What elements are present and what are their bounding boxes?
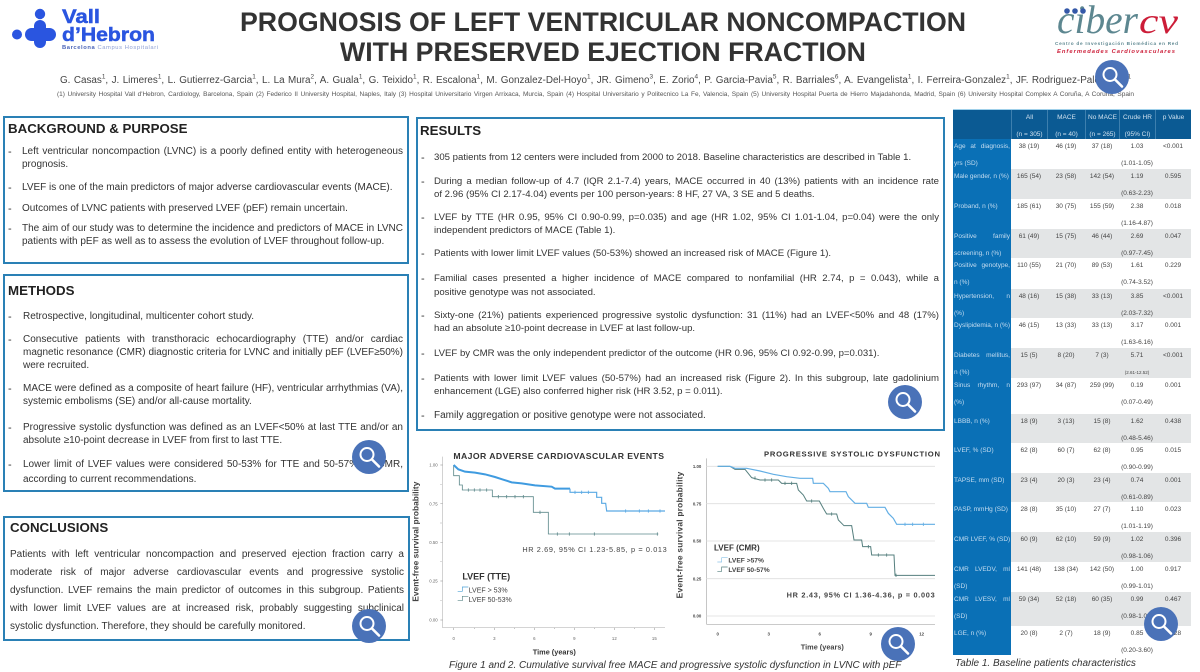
- table: baseline patients characteristics: 0.001: [1165, 477, 1181, 484]
- table: baseline patients characteristics: 2.38: [1131, 203, 1143, 210]
- logo: Vall d'Hebron: Vall: [62, 6, 100, 28]
- text: results bullets: 305 patients from 12 centers were included from 2000 to 2018. Baseline characteristics are described in Table 1.: [434, 152, 911, 163]
- table: baseline patients characteristics: 8 (20): [1058, 352, 1074, 359]
- table: baseline patients characteristics: (0.98-1.06): [1121, 553, 1153, 560]
- table: baseline patients characteristics: (2.61-12.52): [1125, 370, 1149, 375]
- table: baseline patients characteristics: <0.001: [1163, 143, 1183, 150]
- text: conclusions paragraph: moderate risk of major adverse cardiovascular events and progressive systolic: [10, 567, 404, 578]
- table: baseline patients characteristics: 0.74: [1131, 477, 1143, 484]
- table: baseline patients characteristics: Dyslipidemia, n (%): [954, 322, 1010, 329]
- table: baseline patients characteristics: (0.61-0.89): [1121, 494, 1153, 501]
- panel: methods: [3, 274, 409, 492]
- text: results bullets: enhancement (LGE) also conferred higher risk (HR 3.52, p = 0.011).: [434, 386, 723, 397]
- table: baseline patients characteristics: (0.99-1.01): [1121, 583, 1153, 590]
- axes: 0.75: [429, 501, 438, 506]
- table: baseline patients characteristics: 34 (87): [1056, 382, 1076, 389]
- text: results bullets: Patients with lower limit LVEF values (50-53%) showed an increased risk of MACE (Figure 1).: [434, 248, 831, 259]
- table: baseline patients characteristics: All: [1026, 114, 1033, 121]
- table: baseline patients characteristics: Hypertension, n (%): [954, 293, 1010, 317]
- table: baseline patients characteristics: 15 (5): [1020, 352, 1037, 359]
- table: baseline patients characteristics: CMR LVESV, ml (SD): [954, 596, 1010, 620]
- legend: LVEF (TTE): [462, 572, 510, 582]
- logo: CIBERCV: cv: [1139, 2, 1178, 41]
- table: baseline patients characteristics: 2.69: [1131, 233, 1143, 240]
- axes: 0.50: [429, 540, 438, 545]
- table: baseline patients characteristics: <0.001: [1163, 293, 1183, 300]
- table: baseline patients characteristics: 21 (70): [1056, 262, 1076, 269]
- text: conclusions paragraph: dysfunction. LVEF remains the main predictor of outcomes in this subgroup. Patients: [10, 585, 404, 596]
- axes: 1.00: [693, 464, 702, 469]
- text: background bullets: -: [8, 203, 12, 215]
- table: baseline patients characteristics: 23 (4): [1020, 477, 1037, 484]
- axes: 0: [452, 636, 455, 641]
- table: baseline patients characteristics: (0.48-5.46): [1121, 435, 1153, 442]
- table: baseline patients characteristics: (n = 265): [1089, 131, 1116, 138]
- table: baseline patients characteristics: 142 (50): [1090, 566, 1114, 573]
- axes: 15: [652, 636, 657, 641]
- table: baseline patients characteristics: LGE, n (%): [954, 630, 986, 637]
- logo: Vall d'Hebron: Barcelona Campus Hospitalari: [62, 45, 158, 51]
- chart title: PROGRESSIVE SYSTOLIC DYSFUNCTION: [764, 449, 940, 458]
- axes: Time (years): [533, 647, 576, 656]
- table: baseline patients characteristics: (0.20-3.60): [1121, 647, 1153, 654]
- text: results bullets: Patients with lower limit LVEF values (50-57%) had an increased risk (Figure 2). In this subgroup, late gadolinium: [434, 373, 939, 384]
- table: baseline patients characteristics: 46 (44): [1092, 233, 1112, 240]
- caption: table: Table 1. Baseline patients characteristics: [955, 658, 1136, 669]
- text: results bullets: During a median follow-up of 4.7 (IQR 2.1-7.4) years, MACE occurred in 40 (13%) patients with an incidence rate: [434, 176, 939, 187]
- text: results bullets: [421, 152, 939, 422]
- icon: magnifier header: [1095, 60, 1129, 94]
- table: baseline patients characteristics: (0.63-2.23): [1121, 190, 1153, 197]
- text: results bullets: Sixty-one (21%) patients experienced progressive systolic dysfunction: 31 (11%) had an LVEF<50% and 48 (17%): [434, 310, 939, 321]
- text: background bullets: [8, 146, 403, 247]
- curve: LVEF over 57%: [718, 466, 935, 524]
- table: baseline patients characteristics: 1.03: [1131, 143, 1143, 150]
- table: baseline patients characteristics: 60 (7): [1058, 447, 1074, 454]
- text: results bullets: -: [421, 176, 425, 188]
- table: baseline patients characteristics: 89 (53): [1092, 262, 1112, 269]
- table: baseline patients characteristics: 165 (54): [1017, 173, 1041, 180]
- hazard ratio: HR 2.43, 95% CI 1.36-4.36, p = 0.003: [787, 590, 935, 599]
- table: baseline patients characteristics: Proband, n (%): [954, 203, 998, 210]
- text: results bullets: -: [421, 212, 425, 224]
- text: results bullets: -: [421, 348, 425, 360]
- table: baseline patients characteristics: Positive family screening, n (%): [954, 233, 1010, 257]
- table: baseline patients characteristics: 59 (9): [1094, 536, 1110, 543]
- table: baseline patients characteristics: 141 (48): [1017, 566, 1041, 573]
- table: baseline patients characteristics: 0.99: [1131, 596, 1143, 603]
- chart: progressive systolic dysfunction survival curve: [675, 449, 940, 652]
- text: methods bullets: were recruited.: [23, 360, 89, 371]
- table: baseline patients characteristics: 1.00: [1131, 566, 1143, 573]
- text: methods bullets: -: [8, 459, 12, 471]
- table: baseline patients characteristics: No MACE: [1088, 114, 1117, 121]
- table: baseline patients characteristics: 7 (3): [1095, 352, 1109, 359]
- table: baseline patients characteristics: 293 (97): [1017, 382, 1041, 389]
- axes: 9: [869, 631, 872, 636]
- text: results bullets: LVEF by TTE (HR 0.95, 95% CI 0.90-0.99, p=0.035) and age (HR 1.02, 95% CI 1.01-1.04, p=0.04) were the only: [434, 212, 939, 223]
- chart title: MAJOR ADVERSE CARDIOVASCULAR EVENTS: [453, 451, 664, 461]
- text: methods bullets: absolute ≥10-point decrease in LVEF from first to last TTE.: [23, 435, 282, 446]
- table: baseline patients characteristics: 0.047: [1165, 233, 1181, 240]
- axes: 12: [612, 636, 617, 641]
- axes: 3: [767, 631, 770, 636]
- table: baseline patients characteristics: 38 (19): [1019, 143, 1039, 150]
- table: baseline patients characteristics: 23 (4): [1094, 477, 1110, 484]
- table: baseline patients characteristics: 3 (13): [1058, 418, 1074, 425]
- table: baseline patients characteristics: 259 (99): [1090, 382, 1114, 389]
- text: results bullets: Family aggregation or positive genotype were not associated.: [434, 410, 706, 421]
- axes: 0.75: [693, 501, 702, 506]
- table: baseline patients characteristics: 27 (7): [1094, 506, 1110, 513]
- text: methods bullets: Progressive systolic dysfunction was defined as an LVEF<50% at last TTE and/or an: [23, 422, 403, 433]
- legend: LVEF >57%: [728, 558, 764, 565]
- axes: Time (years): [801, 643, 844, 652]
- icon: magnifier methods: [352, 440, 386, 474]
- legend: [714, 544, 770, 574]
- title: [240, 7, 966, 67]
- table: baseline patients characteristics: 59 (34): [1019, 596, 1039, 603]
- table: baseline patients characteristics: 62 (8): [1020, 447, 1037, 454]
- text: methods bullets: Retrospective, longitudinal, multicenter cohort study.: [23, 311, 254, 322]
- table: baseline patients characteristics: 155 (59): [1090, 203, 1114, 210]
- table: baseline patients characteristics: MACE: [1057, 114, 1076, 121]
- logo: CIBERCV: Enfermedades Cardiovasculares: [1057, 49, 1176, 55]
- table: baseline patients characteristics: 1.19: [1131, 173, 1143, 180]
- icon: magnifier figures: [881, 627, 915, 661]
- logo: CIBERCV: Centro de Investigación Biomédica en Red: [1055, 41, 1178, 46]
- table: baseline patients characteristics: Positive genotype, n (%): [954, 262, 1010, 286]
- text: background bullets: Outcomes of LVNC patients with preserved LVEF (pEF) remain uncertain.: [22, 203, 348, 214]
- table: baseline patients characteristics: (0.07-0.49): [1121, 399, 1153, 406]
- table: baseline patients characteristics: 0.438: [1165, 418, 1181, 425]
- table: baseline patients characteristics: 0.018: [1165, 203, 1181, 210]
- heading: results: RESULTS: [420, 123, 481, 138]
- table: baseline patients characteristics: 46 (19): [1056, 143, 1076, 150]
- table: baseline patients characteristics: LVEF, % (SD): [954, 447, 994, 454]
- table: baseline patients characteristics: Sinus rhythm, n (%): [954, 382, 1010, 406]
- table: baseline patients characteristics: 23 (58): [1056, 173, 1076, 180]
- table: baseline patients characteristics: 0.001: [1165, 382, 1181, 389]
- table: baseline patients characteristics: 60 (9): [1020, 536, 1037, 543]
- table: baseline patients characteristics: Crude HR: [1123, 114, 1152, 121]
- table: baseline patients characteristics: 62 (8): [1094, 447, 1110, 454]
- panel: background and purpose: [3, 116, 409, 264]
- table: baseline patients characteristics: (95% CI): [1125, 131, 1150, 138]
- text: background bullets: LVEF is one of the main predictors of major adverse cardiovascular events (MACE).: [22, 182, 393, 193]
- text: results bullets: independent predictors of MACE (Table 1).: [434, 225, 615, 236]
- title: WITH PRESERVED EJECTION FRACTION: [340, 37, 866, 67]
- table: baseline patients characteristics: 0.828: [1165, 630, 1181, 637]
- text: methods bullets: Lower limit of LVEF values were considered 50-53% for TTE and 50-57% for CMR,: [23, 459, 403, 470]
- table: baseline patients characteristics: 18 (9): [1094, 630, 1110, 637]
- table: baseline patients characteristics: 3.85: [1131, 293, 1143, 300]
- table: baseline patients characteristics: 185 (61): [1017, 203, 1041, 210]
- table: baseline patients characteristics: 1.62: [1131, 418, 1143, 425]
- table: baseline patients characteristics: (0.90-0.99): [1121, 464, 1153, 471]
- table: baseline patients characteristics: Age at diagnosis, yrs (SD): [954, 143, 1010, 167]
- axes: 0.00: [693, 614, 702, 619]
- text: background bullets: Left ventricular noncompaction (LVNC) is a poorly defined entity with heterogeneous: [22, 146, 403, 157]
- text: methods bullets: systemic embolisms (SE) and/or all-cause mortality.: [23, 396, 252, 407]
- table: baseline patients characteristics: (n = 305): [1016, 131, 1043, 138]
- table: baseline patients characteristics: Diabetes mellitus, n (%): [954, 352, 1010, 376]
- text: results bullets: -: [421, 310, 425, 322]
- table: baseline patients characteristics: (0.74-3.52): [1121, 279, 1153, 286]
- table: baseline patients characteristics: 52 (18): [1056, 596, 1076, 603]
- table: baseline patients characteristics: (1.01-1.19): [1121, 523, 1153, 530]
- text: background bullets: patients with pEF as well as to assess the evolution of LVEF throughout follow-up.: [22, 236, 384, 247]
- logo: CIBERCV: [1055, 2, 1178, 55]
- table: baseline patients characteristics: 15 (75): [1056, 233, 1076, 240]
- table: baseline patients characteristics: 3.17: [1131, 322, 1143, 329]
- legend: LVEF > 53%: [469, 587, 508, 594]
- axes: 6: [533, 636, 536, 641]
- table: baseline patients characteristics: (1.01-1.05): [1121, 160, 1153, 167]
- legend: LVEF 50-53%: [469, 597, 512, 604]
- axes: 9: [573, 636, 576, 641]
- table: baseline patients characteristics: 1.02: [1131, 536, 1143, 543]
- table: baseline patients characteristics: 0.015: [1165, 447, 1181, 454]
- icon: magnifier table: [1144, 607, 1178, 641]
- heading: methods: METHODS: [8, 283, 74, 298]
- text: methods bullets: -: [8, 311, 12, 323]
- text: methods bullets: -: [8, 334, 12, 346]
- table: baseline patients characteristics: PASP, mmHg (SD): [954, 506, 1008, 513]
- table: baseline patients characteristics: 20 (8): [1020, 630, 1037, 637]
- axes: 1.00: [429, 463, 438, 468]
- logo: Vall d'Hebron: d’Hebron: [62, 24, 155, 46]
- table: baseline patients characteristics: 13 (33): [1056, 322, 1076, 329]
- text: results bullets: -: [421, 273, 425, 285]
- text: methods bullets: magnetic resonance (CMR) diagnostic criteria for LVNC and initially pEF (LVEF≥50%): [23, 347, 403, 358]
- legend: LVEF (CMR): [714, 544, 760, 553]
- axes: [410, 457, 665, 656]
- table: baseline patients characteristics: [953, 109, 1191, 655]
- axes: 0: [716, 631, 719, 636]
- table: baseline patients characteristics: 62 (10): [1056, 536, 1076, 543]
- table: baseline patients characteristics: 18 (9): [1020, 418, 1037, 425]
- text: background bullets: prognosis.: [22, 159, 68, 170]
- table: baseline patients characteristics: 48 (16): [1019, 293, 1039, 300]
- panel: results: [416, 117, 945, 431]
- title: PROGNOSIS OF LEFT VENTRICULAR NONCOMPACTION: [240, 7, 966, 37]
- table: baseline patients characteristics: 0.396: [1165, 536, 1181, 543]
- icon: magnifier conclusions: [352, 609, 386, 643]
- text: methods bullets: -: [8, 383, 12, 395]
- table: baseline patients characteristics: 2 (7): [1059, 630, 1073, 637]
- table: baseline patients characteristics: 33 (13): [1092, 322, 1112, 329]
- hazard ratio: HR 2.69, 95% CI 1.23-5.85, p = 0.013: [522, 545, 667, 554]
- caption: figures: Figure 1 and 2. Cumulative survival free MACE and progressive systolic dysfunction in LVNC with pEF: [449, 660, 901, 671]
- table: baseline patients characteristics: (0.98-1.01): [1121, 613, 1153, 620]
- table: baseline patients characteristics: (1.16-4.87): [1121, 220, 1153, 227]
- text: methods bullets: -: [8, 422, 12, 434]
- text: methods bullets: [8, 311, 403, 485]
- text: results bullets: had an absolute ≥10-point decrease in LVEF at last follow-up.: [434, 323, 695, 334]
- legend: LVEF 50-57%: [728, 567, 770, 574]
- axes: 0.25: [429, 579, 438, 584]
- text: conclusions paragraph: with lower limit LVEF values are at increased risk, probably suggesting subclinical: [10, 603, 404, 614]
- table: baseline patients characteristics: 15 (8): [1094, 418, 1110, 425]
- table: baseline patients characteristics: Male gender, n (%): [954, 173, 1009, 180]
- table: baseline patients characteristics: 5.71: [1131, 352, 1143, 359]
- table: baseline patients characteristics: 0.85: [1131, 630, 1143, 637]
- curve: LVEF 50-57%: [718, 466, 935, 575]
- text: background bullets: -: [8, 182, 12, 194]
- axes: Event-free survival probability: [410, 481, 420, 602]
- table: baseline patients characteristics: 1.61: [1131, 262, 1143, 269]
- legend: [458, 572, 512, 604]
- axes: 12: [919, 631, 925, 636]
- table: baseline patients characteristics: 61 (49): [1019, 233, 1039, 240]
- table: baseline patients characteristics: 35 (10): [1056, 506, 1076, 513]
- text: background bullets: The aim of our study was to determine the incidence and predictors of MACE in LVNC: [22, 223, 403, 234]
- text: conclusions paragraph: Patients with left ventricular noncompaction and preserved ejection fraction carry a: [10, 549, 404, 560]
- heading: background and purpose: BACKGROUND & PURPOSE: [8, 121, 188, 136]
- table: baseline patients characteristics: 0.467: [1165, 596, 1181, 603]
- text: methods bullets: MACE were defined as a composite of heart failure (HF), ventricular arrhythmias (VA),: [23, 383, 403, 394]
- table: baseline patients characteristics: 37 (18): [1092, 143, 1112, 150]
- table: baseline patients characteristics: LBBB, n (%): [954, 418, 990, 425]
- table: baseline patients characteristics: 0.19: [1131, 382, 1143, 389]
- affiliations: (1) University Hospital Vall d'Hebron, Cardiology, Barcelona, Spain (2) Federico II University Hospital, Naples, Italy (3) Hospital Universitario Virgen Arrixaca, Murcia, Spain (4) Hospital Universitario y Politecnico La Fe, Valencia, Spain (5) University Hospital Puerta de Hierro Majadahonda, Madrid, Spain (6) University Hospital Complex A Coruña, A Coruña, Spain: [57, 91, 1134, 98]
- table: baseline patients characteristics: 138 (34): [1054, 566, 1078, 573]
- table: baseline patients characteristics: 0.917: [1165, 566, 1181, 573]
- table: baseline patients characteristics: TAPSE, mm (SD): [954, 477, 1004, 484]
- table: baseline patients characteristics: (n = 40): [1055, 131, 1078, 138]
- axes: Event-free survival probability: [675, 471, 685, 598]
- text: background bullets: -: [8, 146, 12, 158]
- text: conclusions paragraph: systolic dysfunction. Therefore, they should be carefully monitored.: [10, 621, 306, 632]
- axes: 3: [493, 636, 496, 641]
- text: conclusions paragraph: [10, 549, 404, 632]
- text: results bullets: LVEF by CMR was the only independent predictor of the outcome (HR 0.96, 95% CI 0.92-0.99, p=0.031).: [434, 348, 879, 359]
- table: baseline patients characteristics: (0.97-7.45): [1121, 250, 1153, 257]
- table: baseline patients characteristics: 20 (3): [1058, 477, 1074, 484]
- text: methods bullets: Consecutive patients with transthoracic echocardiography (TTE) and/or cardiac: [23, 334, 403, 345]
- heading: conclusions: CONCLUSIONS: [10, 520, 108, 535]
- table: baseline patients characteristics: 28 (8): [1020, 506, 1037, 513]
- authors: G. Casas1, J. Limeres1, L. Gutierrez-Garcia1, L. La Mura2, A. Guala1, G. Teixido1, R. Escalona1, M. Gonzalez-Del-Hoyo1, JR. Gimeno3, E. Zorio4, P. Garcia-Pavia5, R. Barriales6, A. Evangelista1, I. Ferreira-Gonzalez1, JF. Rodriguez-Palomares1: [60, 74, 1131, 86]
- table: baseline patients characteristics: 46 (15): [1019, 322, 1039, 329]
- logo: Vall d'Hebron: [12, 6, 158, 51]
- table: baseline patients characteristics: 30 (75): [1056, 203, 1076, 210]
- table: baseline patients characteristics: 33 (13): [1092, 293, 1112, 300]
- text: results bullets: -: [421, 373, 425, 385]
- table: baseline patients characteristics: CMR LVEF, % (SD): [954, 536, 1010, 543]
- table: baseline patients characteristics: CMR LVEDV, ml (SD): [954, 566, 1010, 590]
- table: baseline patients characteristics: 0.95: [1131, 447, 1143, 454]
- text: results bullets: -: [421, 410, 425, 422]
- table: baseline patients characteristics: 15 (38): [1056, 293, 1076, 300]
- curve: LVEF over 53%: [454, 465, 570, 489]
- axes: [675, 458, 935, 652]
- text: results bullets: -: [421, 152, 425, 164]
- text: background bullets: -: [8, 223, 12, 235]
- chart: major adverse cardiovascular events survival curve: [410, 451, 667, 656]
- table: baseline patients characteristics: 110 (55): [1017, 262, 1041, 269]
- table: baseline patients characteristics: 0.023: [1165, 506, 1181, 513]
- table: baseline patients characteristics: 0.595: [1165, 173, 1181, 180]
- table: baseline patients characteristics: (1.63-6.16): [1121, 339, 1153, 346]
- table: baseline patients characteristics: 0.001: [1165, 322, 1181, 329]
- table: baseline patients characteristics: 0.229: [1165, 262, 1181, 269]
- text: results bullets: -: [421, 248, 425, 260]
- table: baseline patients characteristics: 1.10: [1131, 506, 1143, 513]
- icon: magnifier results: [888, 385, 922, 419]
- axes: 0.50: [693, 539, 702, 544]
- table: baseline patients characteristics: 60 (35): [1092, 596, 1112, 603]
- axes: 0.25: [693, 576, 702, 581]
- axes: 6: [818, 631, 821, 636]
- table: baseline patients characteristics: p Value: [1163, 114, 1184, 121]
- axes: 0.00: [429, 618, 438, 623]
- text: results bullets: positive genotype was not associated.: [434, 287, 596, 298]
- table: baseline patients characteristics: <0.001: [1163, 352, 1183, 359]
- panel: conclusions: [3, 516, 410, 641]
- text: results bullets: of 2.96 (95% CI 2.17-4.04) events per 100 person-years: 8 HF, 27 VA, 3 SE and 5 deaths.: [434, 189, 815, 200]
- text: results bullets: Familial cases presented a higher incidence of MACE compared to nonfamilial (HR 2.74, p = 0.043), while a: [434, 273, 939, 284]
- table: baseline patients characteristics: 142 (54): [1090, 173, 1114, 180]
- text: methods bullets: according to current recommendations.: [23, 474, 196, 485]
- table: baseline patients characteristics: (2.03-7.32): [1121, 310, 1153, 317]
- curve: LVEF 50-53%: [454, 465, 658, 534]
